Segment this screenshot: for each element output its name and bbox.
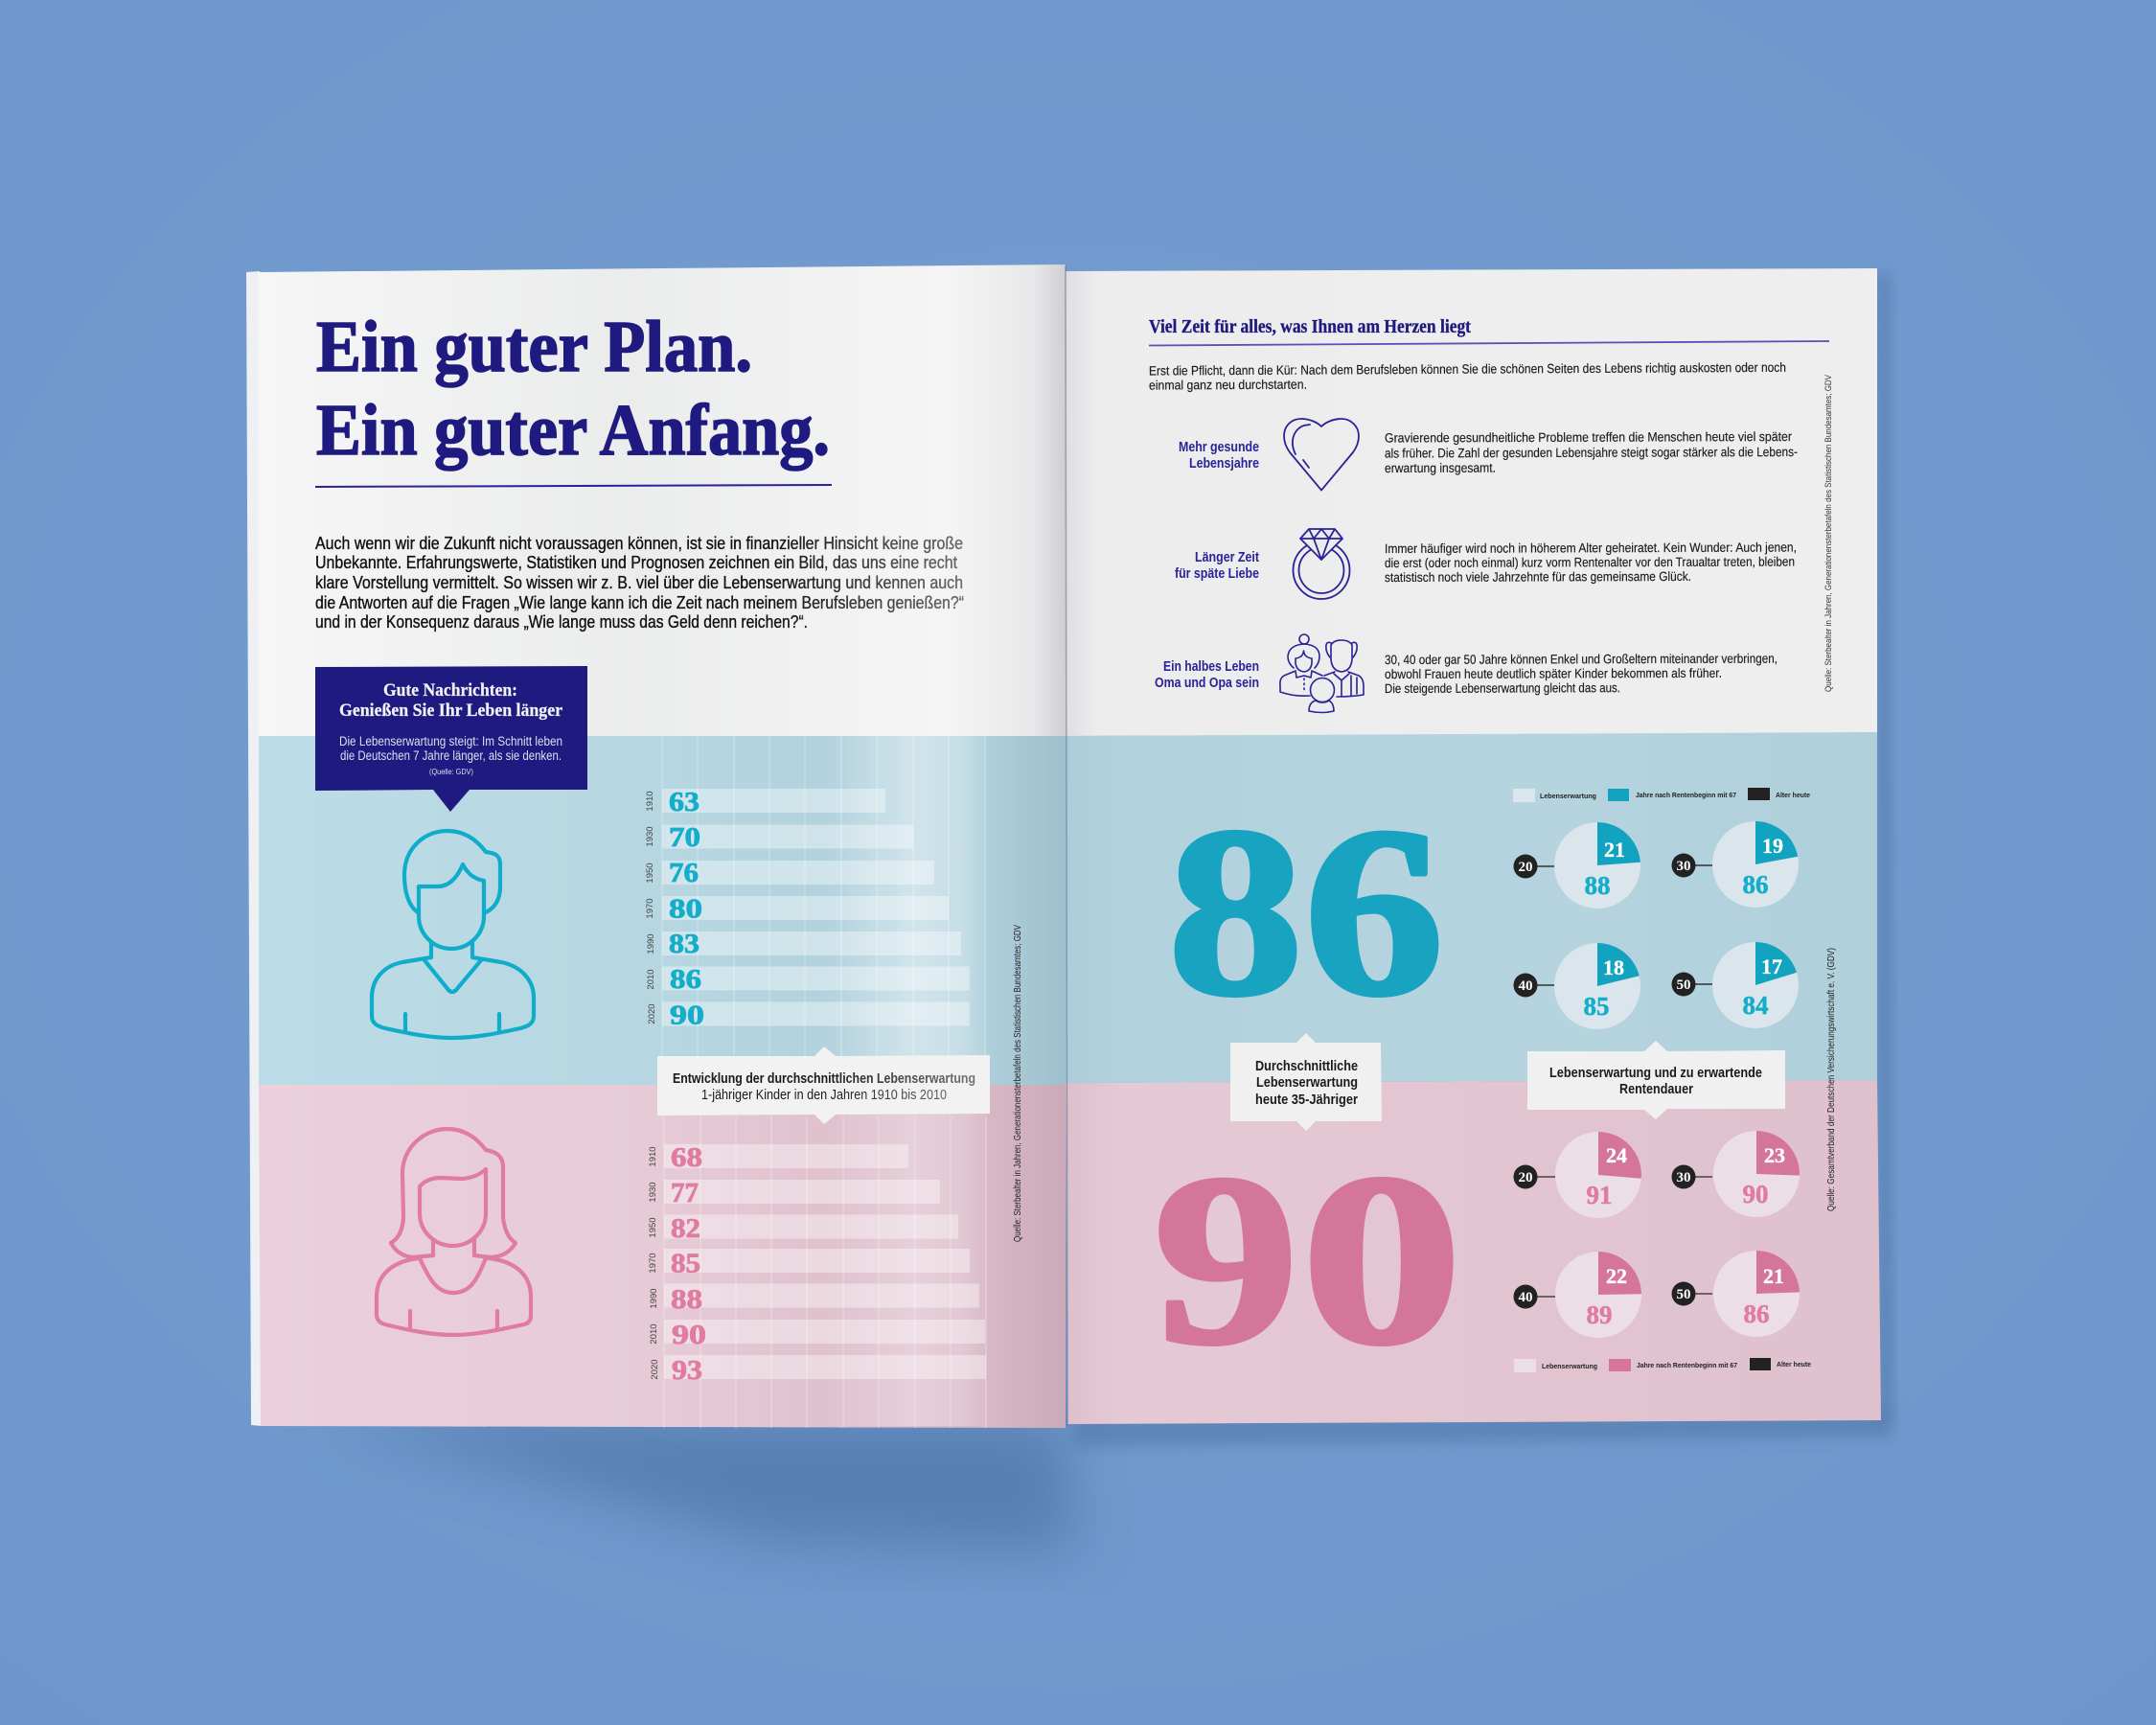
bar chart: women life expectancy: 1910 xyxy=(648,1146,658,1167)
callout: average life expectancy: Durchschnittliche xyxy=(1255,1058,1358,1074)
pie: age 50 xyxy=(1671,1251,1800,1337)
intro paragraph: Auch wenn wir die Zukunft nicht voraussagen können, ist sie in finanzieller Hinsicht keine große xyxy=(315,534,963,553)
pie charts: women xyxy=(1514,1131,1800,1338)
pie: age 40: 18 xyxy=(1603,955,1624,979)
bar chart: men life expectancy: 83 xyxy=(669,929,700,959)
pie: age 20: 91 xyxy=(1587,1181,1612,1209)
row: healthy years: Mehr gesunde xyxy=(1179,440,1259,455)
callout: pension duration: Lebenserwartung und zu erwartende xyxy=(1549,1065,1762,1081)
pie: age 20: 24 xyxy=(1606,1143,1627,1167)
blue band xyxy=(259,736,1066,1085)
bar chart: women life expectancy: 1970 xyxy=(648,1253,658,1274)
callout: pension duration xyxy=(1527,1041,1785,1119)
title xyxy=(316,307,830,471)
pie: age 40: 85 xyxy=(1583,992,1610,1021)
pie: age 30: 30 xyxy=(1677,1170,1690,1185)
source note bottom right: Quelle: Gesamtverband der Deutschen Versicherungswirtschaft e. V. (GDV) xyxy=(1825,948,1837,1211)
pie: age 50: 21 xyxy=(1763,1264,1784,1288)
pie: age 30 xyxy=(1671,1131,1800,1217)
bar chart: women life expectancy: 68 xyxy=(671,1142,702,1173)
icon: diamond ring xyxy=(1294,529,1349,599)
big number: women 90 xyxy=(1154,1125,1462,1395)
pie: age 50: 84 xyxy=(1742,991,1769,1020)
pie: age 20: 20 xyxy=(1518,1170,1533,1185)
legend: men xyxy=(1513,788,1810,802)
callout: good news: (Quelle: GDV) xyxy=(429,768,473,776)
callout: good news: Gute Nachrichten: xyxy=(383,680,517,701)
bar chart: men life expectancy: 86 xyxy=(670,964,701,995)
pie: age 30: 23 xyxy=(1764,1143,1785,1167)
chart grid and haze xyxy=(662,736,987,1428)
row: grandparents: Oma und Opa sein xyxy=(1155,676,1259,691)
row: grandparents xyxy=(1155,634,1778,713)
row: late love: statistisch noch viele Jahrzehnte für das gemeinsame Glück. xyxy=(1385,569,1691,585)
bar chart: men life expectancy: 63 xyxy=(669,787,700,817)
panel: left page xyxy=(246,264,1066,1428)
bar chart: women life expectancy: 1950 xyxy=(648,1217,658,1238)
bar chart: men life expectancy: 80 xyxy=(669,893,702,924)
pie: age 30: 86 xyxy=(1742,870,1769,899)
bar chart: women life expectancy: 88 xyxy=(671,1284,702,1315)
intro text: Erst die Pflicht, dann die Kür: Nach dem Berufsleben können Sie die schönen Seiten des Lebens richtig auskosten oder noch xyxy=(1149,360,1786,378)
row: healthy years: als früher. Die Zahl der gesunden Lebensjahre steigt sogar stärker als die Lebens- xyxy=(1385,445,1798,460)
pie: age 40: 22 xyxy=(1606,1264,1627,1288)
bar chart: women life expectancy: 77 xyxy=(671,1178,699,1208)
icon: heart xyxy=(1284,419,1359,491)
pie: age 20 xyxy=(1514,1132,1641,1218)
callout: good news: Die Lebenserwartung steigt: Im Schnitt leben xyxy=(339,734,562,748)
pie: age 20: 88 xyxy=(1585,871,1610,900)
pie: age 40: 40 xyxy=(1518,978,1533,994)
big number: men 86: 6 xyxy=(1304,777,1444,1046)
pie: age 50: 17 xyxy=(1761,954,1782,978)
icon: man xyxy=(372,831,534,1038)
row: late love: die erst (oder noch einmal) kurz vorm Rentenalter vor den Traualtar treten, bleiben xyxy=(1385,555,1795,570)
chart caption callout xyxy=(657,1046,990,1124)
big number: men 86 xyxy=(1168,777,1444,1046)
pie: age 20: 20 xyxy=(1518,860,1533,875)
callout: good news xyxy=(315,666,587,812)
row: grandparents: Ein halbes Leben xyxy=(1163,659,1259,675)
bar chart: men life expectancy: 2020 xyxy=(647,1003,657,1024)
bar chart: women life expectancy: 2020 xyxy=(650,1359,660,1380)
callout: pension duration: Rentendauer xyxy=(1619,1081,1693,1097)
pie: age 50: 50 xyxy=(1677,1287,1690,1302)
blue band xyxy=(1066,732,1877,1083)
pie: age 50 xyxy=(1671,942,1799,1028)
bar chart: men life expectancy: 2010 xyxy=(646,969,656,990)
row: grandparents: obwohl Frauen heute deutlich später Kinder bekommen als früher. xyxy=(1385,666,1722,681)
bar chart: men life expectancy: 1990 xyxy=(646,933,656,954)
big number: women 90: 0 xyxy=(1301,1125,1462,1395)
row: late love: Immer häufiger wird noch in höherem Alter geheiratet. Kein Wunder: Auch jenen, xyxy=(1385,540,1797,556)
title: Ein guter Plan. xyxy=(316,307,752,387)
legend: women: Alter heute xyxy=(1777,1360,1811,1368)
title: Ein guter Anfang. xyxy=(316,390,830,471)
callout: good news: Genießen Sie Ihr Leben länger xyxy=(339,701,563,721)
legend: men: Alter heute xyxy=(1776,791,1810,799)
legend: women: Lebenserwartung xyxy=(1542,1362,1597,1370)
pie: age 20 xyxy=(1514,822,1640,908)
row: healthy years: erwartung insgesamt. xyxy=(1385,461,1496,475)
spine fold xyxy=(1066,265,1067,1426)
bar chart: women life expectancy: 82 xyxy=(671,1213,700,1244)
heading rule xyxy=(1149,341,1829,345)
bar chart: men life expectancy: 1910 xyxy=(645,791,655,812)
big number: women 90: 9 xyxy=(1154,1125,1298,1395)
cover edge xyxy=(246,271,262,1426)
intro paragraph xyxy=(315,534,964,632)
chart caption callout: 1-jähriger Kinder in den Jahren 1910 bis 2010 xyxy=(701,1088,947,1103)
bar chart: women life expectancy: 1930 xyxy=(648,1182,658,1203)
intro paragraph: Unbekannte. Erfahrungswerte, Statistiken und Prognosen zeichnen ein Bild, das uns eine recht xyxy=(315,553,957,572)
callout: average life expectancy: Lebenserwartung xyxy=(1256,1074,1358,1091)
panel: right page xyxy=(1066,268,1881,1424)
big number: men 86: 8 xyxy=(1168,777,1303,1046)
row: grandparents: Die steigende Lebenserwartung gleicht das aus. xyxy=(1385,680,1620,696)
bar chart: women life expectancy: 93 xyxy=(672,1355,702,1386)
row: healthy years: Gravierende gesundheitliche Probleme treffen die Menschen heute viel später xyxy=(1385,429,1792,445)
legend: women: Jahre nach Rentenbeginn mit 67 xyxy=(1637,1361,1737,1369)
intro paragraph: die Antworten auf die Fragen „Wie lange kann ich die Zeit nach meinem Berufsleben genießen?“ xyxy=(315,593,964,612)
pie: age 40 xyxy=(1514,943,1640,1029)
bar chart: men life expectancy: 1930 xyxy=(645,826,655,847)
bar chart: men life expectancy: 76 xyxy=(669,858,699,888)
source note left: Quelle: Sterbealter in Jahren, Generationensterbetafeln des Statistischen Bundesamtes; GDV xyxy=(1013,925,1023,1242)
pie charts: men xyxy=(1514,821,1799,1029)
pie: age 40 xyxy=(1514,1252,1641,1338)
bar chart: women life expectancy: 90 xyxy=(672,1320,706,1350)
intro text: einmal ganz neu durchstarten. xyxy=(1149,378,1307,392)
callout: good news: die Deutschen 7 Jahre länger, als sie denken. xyxy=(340,748,562,763)
bar chart: women life expectancy xyxy=(648,1142,986,1386)
pie: age 50: 86 xyxy=(1744,1300,1769,1328)
row: late love: Länger Zeit xyxy=(1195,550,1259,565)
pie: age 30: 19 xyxy=(1762,834,1783,858)
bar chart: women life expectancy: 85 xyxy=(671,1248,700,1278)
pie: age 30: 90 xyxy=(1742,1180,1769,1208)
icon: woman xyxy=(377,1129,531,1335)
row: healthy years: Lebensjahre xyxy=(1189,456,1259,472)
bar chart: women life expectancy: 2010 xyxy=(649,1323,659,1345)
icon: family xyxy=(1280,634,1364,713)
section heading: Viel Zeit für alles, was Ihnen am Herzen liegt xyxy=(1149,316,1471,337)
title rule xyxy=(315,485,832,487)
row: grandparents: 30, 40 oder gar 50 Jahre können Enkel und Großeltern miteinander verbringen, xyxy=(1385,652,1778,667)
bar chart: men life expectancy: 90 xyxy=(670,1000,704,1031)
pie: age 40: 89 xyxy=(1587,1300,1612,1329)
intro paragraph: klare Vorstellung vermittelt. So wissen wir z. B. viel über die Lebenserwartung und kennen auch xyxy=(315,573,963,592)
row: late love: für späte Liebe xyxy=(1175,566,1259,582)
pie: age 30 xyxy=(1671,821,1799,908)
page white area xyxy=(1066,268,1877,736)
pie: age 20: 21 xyxy=(1604,838,1625,862)
page white area xyxy=(259,264,1066,738)
pie: age 50: 50 xyxy=(1677,978,1690,993)
callout: average life expectancy xyxy=(1230,1033,1382,1131)
legend: men: Jahre nach Rentenbeginn mit 67 xyxy=(1636,791,1736,799)
bar chart: men life expectancy: 70 xyxy=(669,822,700,853)
chart caption callout: Entwicklung der durchschnittlichen Lebenserwartung xyxy=(673,1071,975,1087)
legend: women xyxy=(1514,1358,1811,1372)
pink band xyxy=(1066,1080,1881,1424)
intro text xyxy=(1149,360,1786,392)
intro paragraph: und in der Konsequenz daraus „Wie lange muss das Geld denn reichen?“. xyxy=(315,612,808,632)
callout: average life expectancy: heute 35-Jähriger xyxy=(1255,1092,1358,1108)
legend: men: Lebenserwartung xyxy=(1540,792,1596,800)
bar chart: men life expectancy: 1970 xyxy=(645,898,655,919)
pie: age 30: 30 xyxy=(1677,859,1690,874)
pie: age 40: 40 xyxy=(1518,1290,1533,1305)
bar chart: men life expectancy: 1950 xyxy=(645,862,655,884)
bar chart: women life expectancy: 1990 xyxy=(649,1288,659,1309)
source note top right: Quelle: Sterbealter in Jahren, Generationensterbetafeln des Statistischen Bundesamtes; GDV xyxy=(1823,374,1834,692)
pink band xyxy=(259,1085,1066,1428)
magazine shadow xyxy=(316,273,1892,1552)
bar chart: men life expectancy xyxy=(645,787,970,1031)
row: healthy years xyxy=(1179,419,1798,491)
row: late love xyxy=(1175,529,1797,599)
